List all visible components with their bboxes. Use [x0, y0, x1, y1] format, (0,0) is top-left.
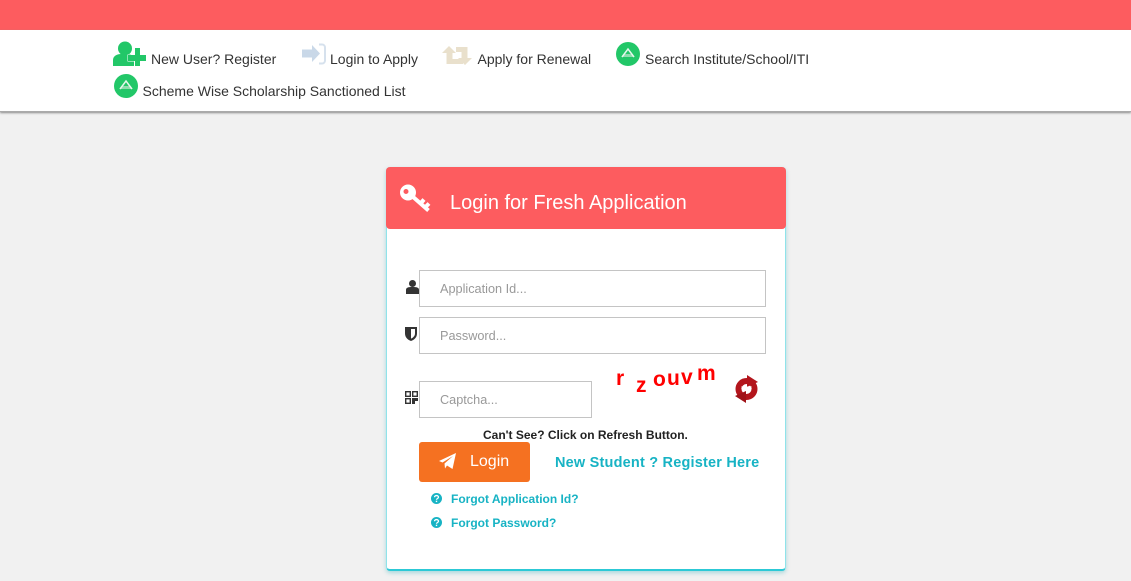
nav link: renewal: Apply for Renewal — [478, 51, 591, 67]
register link: New Student ? Register Here — [555, 455, 759, 471]
forgot application id link: Forgot Application Id? — [451, 492, 579, 506]
panel header — [386, 167, 786, 229]
login panel — [386, 167, 786, 571]
icon: help — [431, 493, 442, 504]
forgot password link: Forgot Password? — [451, 516, 556, 530]
captcha image: v — [681, 366, 693, 389]
captcha image: r — [616, 367, 624, 390]
icon: help — [431, 517, 442, 528]
captcha image: u — [667, 367, 680, 390]
icon: shield — [405, 327, 417, 341]
icon: qr code — [405, 391, 418, 404]
password input — [419, 317, 766, 354]
icon: renewal arrows — [442, 46, 472, 65]
navigation bar — [0, 30, 1131, 112]
captcha input — [419, 381, 592, 418]
panel title: Login for Fresh Application — [450, 192, 687, 214]
icon: user — [406, 280, 419, 294]
captcha image: o — [653, 368, 666, 391]
application id input: Application Id... — [440, 282, 527, 296]
nav link: search: Search Institute/School/ITI — [645, 51, 809, 67]
nav link: scheme list: Scheme Wise Scholarship Sanctioned List — [142, 83, 406, 99]
nav link: register: New User? Register — [151, 51, 276, 67]
icon: key — [400, 184, 430, 212]
icon: login arrow — [302, 44, 326, 64]
login button — [419, 442, 530, 482]
nav link: login: Login to Apply — [330, 51, 418, 67]
application id input — [419, 270, 766, 307]
icon: paper plane — [439, 453, 456, 469]
captcha image: m — [697, 362, 716, 385]
top red bar — [0, 0, 1131, 30]
captcha image: z — [636, 374, 646, 397]
captcha hint: Can't See? Click on Refresh Button. — [483, 428, 688, 442]
icon: new user — [113, 42, 146, 66]
button label: Login — [470, 453, 509, 470]
icon: refresh — [735, 375, 758, 403]
password input: Password... — [440, 329, 506, 343]
captcha input: Captcha... — [440, 393, 498, 407]
icon: search institute — [616, 42, 640, 66]
captcha image — [616, 362, 716, 397]
icon: scheme list — [114, 74, 138, 98]
